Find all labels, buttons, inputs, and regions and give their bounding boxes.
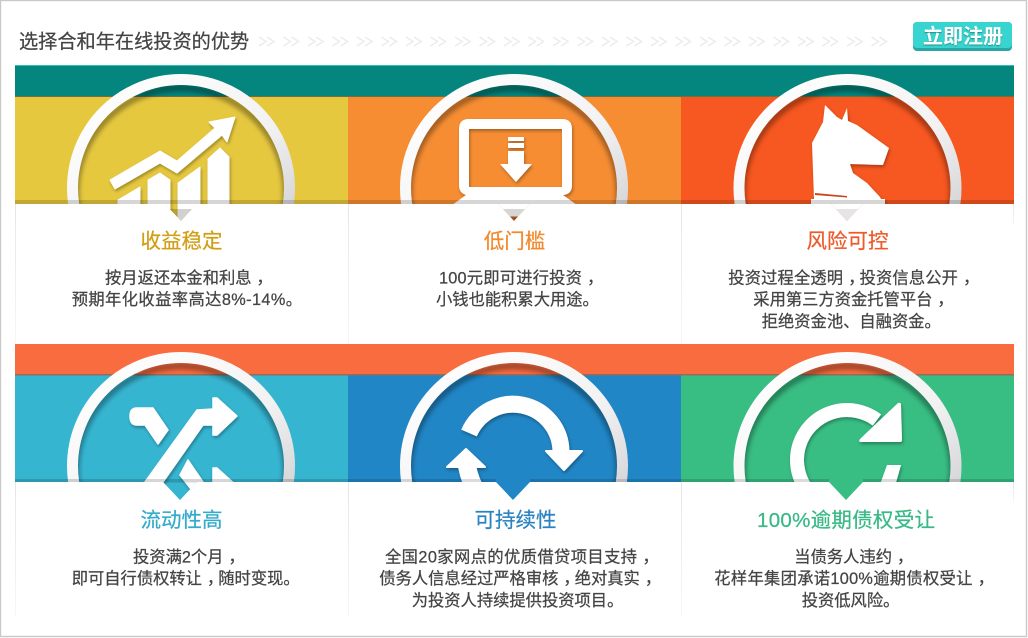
panel 4 description: 即可自行债权转让 ，随时变现。 [72,570,300,588]
panel 1 description: 预期年化收益率高达8%-14%。 [72,291,302,309]
panel 5 description: 全国20家网点的优质借贷项目支持 ， [385,548,659,566]
panel 2 artwork [348,65,681,221]
panel 6 description: 投资低风险。 [802,592,899,610]
panel 4 description: 投资满2个月 ， [133,548,245,566]
icon: chess knight [811,105,889,225]
panel 6 description: 花样年集团承诺100%逾期债权受让 ， [714,570,994,588]
panel: 收益稳定 [15,65,348,309]
panel 1 artwork [15,65,348,221]
register button [913,22,1012,51]
panel 6 title: 100%逾期债权受让 [757,509,935,532]
panel 3 description: 拒绝资金池、自融资金。 [762,313,941,331]
panel 3 title: 风险可控 [806,230,888,253]
icon: refresh arrow [790,402,904,482]
panel: 可持续性 [348,344,681,610]
panel 3 artwork [681,65,1014,221]
heading: 选择合和年在线投资的优势 [19,31,249,53]
panel 3 description: 采用第三方资金托管平台 ， [753,291,954,309]
register button: 立即注册 [923,24,1003,48]
icon: shuffle arrows [130,398,237,500]
panel 5 title: 可持续性 [474,509,556,532]
icon: monitor with download arrow [452,119,577,225]
panel 5 description: 债务人信息经过严格审核 ，绝对真实 ， [379,570,661,588]
panel 1 description: 按月返还本金和利息 ， [105,270,273,288]
decorative column lines [15,204,1014,616]
panel 5 description: 为投资人持续提供投资项目。 [412,592,623,610]
panel 1 title: 收益稳定 [140,230,222,253]
panel 2 description: 小钱也能积累大用途。 [436,291,599,309]
panel 4 title: 流动性高 [140,509,222,532]
panel 3 description: 投资过程全透明 ，投资信息公开 ， [728,270,980,288]
panel: 流动性高 [15,344,348,588]
panel 2 title: 低门槛 [484,230,545,253]
decorative chevrons [259,37,886,46]
panel 4 artwork [15,344,348,500]
panel 2 description: 100元即可进行投资 ， [439,270,604,288]
panel 5 artwork [348,344,681,500]
panel: 低门槛 [348,65,681,309]
panel 6 description: 当债务人违约 ， [794,548,913,566]
icon: rising chart [110,117,235,225]
panel: 100%逾期债权受让 [681,344,1014,610]
panel 6 artwork [681,344,1014,500]
panel: 风险可控 [681,65,1014,331]
icon: rotating arrows [447,404,582,494]
